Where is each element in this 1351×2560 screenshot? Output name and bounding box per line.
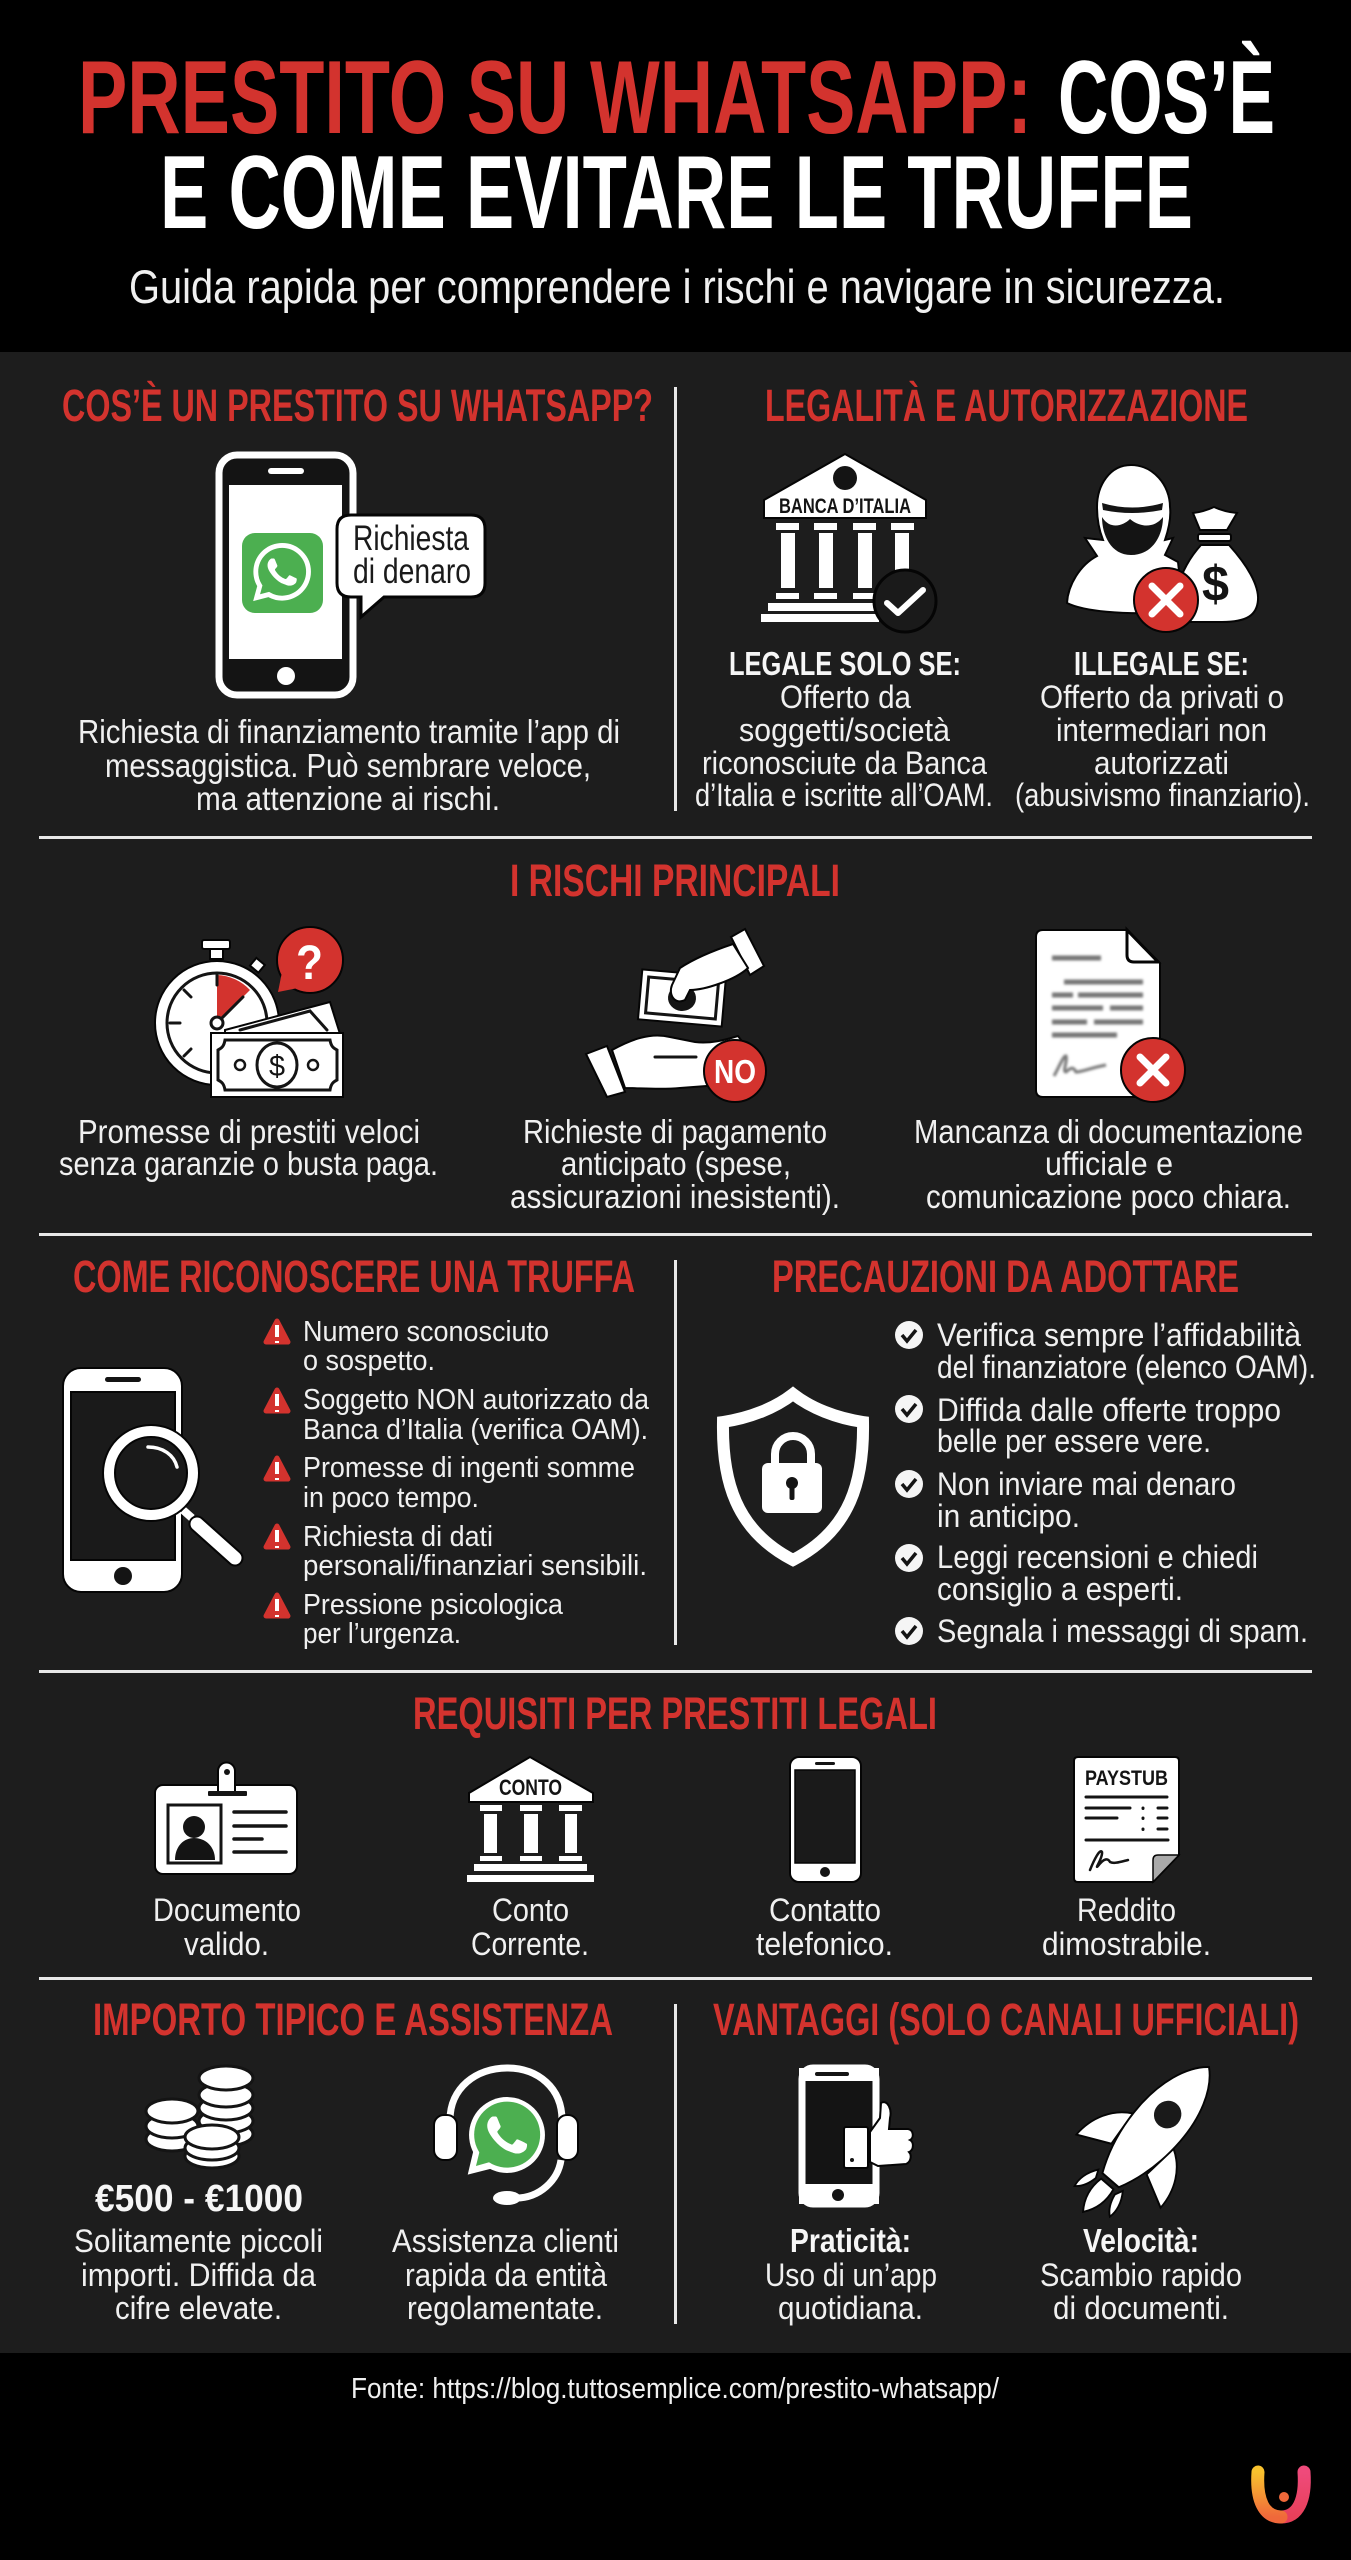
illegale se: ILLEGALE SE: [1074, 645, 1249, 682]
header [78, 40, 1275, 313]
icon: hooded thief with money bag [1067, 465, 1258, 632]
warning icon 1 [266, 1321, 288, 1343]
risk text 3: comunicazione poco chiara. [926, 1178, 1291, 1215]
assistance description: regolamentate. [407, 2290, 603, 2326]
warning item 1 [303, 1316, 549, 1377]
warning item 1: o sospetto. [303, 1345, 435, 1377]
icon: bank conto: CONTO [499, 1775, 562, 1800]
check icon 3 [895, 1470, 923, 1498]
warning icon 3 [266, 1458, 288, 1480]
check item 4: Leggi recensioni e chiedi [937, 1539, 1258, 1575]
praticità [765, 2222, 937, 2326]
panel: requisiti per prestiti legali [153, 1688, 1211, 1962]
heading: REQUISITI PER PRESTITI LEGALI [413, 1688, 937, 1739]
heading: COME RICONOSCERE UNA TRUFFA [73, 1251, 635, 1302]
heading: COS’È UN PRESTITO SU WHATSAPP? [62, 380, 653, 431]
warning item 4: Richiesta di dati [303, 1521, 493, 1553]
risk text 1: senza garanzie o busta paga. [59, 1145, 438, 1182]
amount description: importi. Diffida da [81, 2257, 316, 2293]
icon: stopwatch and money [155, 927, 343, 1097]
icon: id card [155, 1762, 297, 1874]
requisito 3 text: telefonico. [756, 1926, 893, 1962]
description: ma attenzione ai rischi. [196, 780, 500, 817]
requisito 2 text: Corrente. [471, 1926, 589, 1962]
check icon 5 [895, 1617, 923, 1645]
icon: hands exchanging money [586, 929, 766, 1102]
risk text 2 [510, 1113, 840, 1215]
icon: banca d'italia: BANCA D’ITALIA [779, 495, 911, 518]
illegale se: intermediari non [1056, 712, 1267, 748]
requisito 2 text [471, 1892, 589, 1962]
icon: phone with whatsapp [219, 455, 485, 695]
warning item 3 [303, 1452, 635, 1514]
icon: stopwatch and money: ? [296, 937, 323, 990]
requisito 1 text: Documento [153, 1892, 301, 1928]
description: Richiesta di finanziamento tramite l’app di [78, 713, 620, 750]
icon: phone with thumbs up [799, 2068, 913, 2204]
panel: vantaggi [713, 1994, 1299, 2326]
panel: precauzioni da adottare [723, 1251, 1316, 1649]
amount: €500 - €1000 [95, 2178, 303, 2220]
warning item 2: Banca d’Italia (verifica OAM). [303, 1414, 648, 1446]
assistance description: rapida da entità [405, 2257, 607, 2293]
icon: rocket [1041, 2030, 1251, 2249]
speech bubble: di denaro [353, 552, 471, 591]
illegale se: autorizzati [1094, 745, 1229, 781]
check item 2: Diffida dalle offerte troppo [937, 1392, 1281, 1428]
check item 2 [937, 1392, 1281, 1459]
legale solo se: riconosciute da Banca [702, 745, 987, 781]
check item 1 [937, 1317, 1316, 1385]
velocità: di documenti. [1053, 2290, 1229, 2326]
icon: stopwatch and money: $ [269, 1050, 285, 1083]
check icon 2 [895, 1395, 923, 1423]
warning item 3: in poco tempo. [303, 1482, 479, 1514]
assistance description: Assistenza clienti [392, 2223, 619, 2259]
risk text 2: Richieste di pagamento [523, 1113, 827, 1150]
icon: banca d'italia [761, 454, 936, 632]
requisito 4 text [1042, 1892, 1211, 1962]
legale solo se: Offerto da [780, 679, 911, 715]
amount description [74, 2223, 323, 2326]
requisito 2 text: Conto [492, 1892, 569, 1928]
icon: paystub: PAYSTUB [1085, 1767, 1168, 1790]
content background panel [0, 352, 1351, 2353]
source footer: Fonte: https://blog.tuttosemplice.com/prestito-whatsapp/ [351, 2373, 1000, 2405]
panel: importo tipico e assistenza [74, 1994, 619, 2326]
icon: bank conto [467, 1757, 594, 1882]
speech bubble [337, 515, 485, 617]
requisito 3 text [756, 1892, 893, 1962]
icon: hooded thief with money bag: $ [1202, 556, 1229, 612]
panel: i rischi principali [59, 855, 1303, 1215]
warning item 1: Numero sconosciuto [303, 1316, 549, 1348]
warning item 3: Promesse di ingenti somme [303, 1452, 635, 1484]
velocità: Velocità: [1083, 2222, 1199, 2259]
check item 5: Segnala i messaggi di spam. [937, 1613, 1308, 1649]
panel: cos'è un prestito [62, 380, 653, 817]
warning icon 5 [266, 1595, 288, 1617]
warning item 2: Soggetto NON autorizzato da [303, 1384, 650, 1416]
warning list [266, 1316, 650, 1650]
warning item 5: Pressione psicologica [303, 1589, 564, 1621]
praticità: quotidiana. [778, 2290, 923, 2326]
check icon 4 [895, 1544, 923, 1572]
heading: IMPORTO TIPICO E ASSISTENZA [93, 1994, 613, 2045]
risk text 2: assicurazioni inesistenti). [510, 1178, 840, 1215]
title [78, 40, 1275, 251]
warning item 2 [303, 1384, 650, 1446]
assistance description [392, 2223, 619, 2326]
logo [1258, 2472, 1304, 2517]
amount description: Solitamente piccoli [74, 2223, 323, 2259]
velocità: Scambio rapido [1040, 2257, 1242, 2293]
praticità: Uso di un’app [765, 2257, 937, 2293]
description: messaggistica. Può sembrare veloce, [105, 747, 591, 784]
requisito 3 text: Contatto [769, 1892, 881, 1928]
legale solo se: soggetti/società [739, 712, 950, 748]
check item 4: consiglio a esperti. [937, 1571, 1183, 1607]
legale solo se [695, 645, 993, 813]
panel: come riconoscere una truffa [63, 1251, 650, 1650]
warning item 5 [303, 1589, 564, 1650]
risk text 3: Mancanza di documentazione [914, 1113, 1303, 1150]
risk text 2: anticipato (spese, [561, 1145, 791, 1182]
check item 4 [937, 1539, 1258, 1607]
check icon 1 [895, 1321, 923, 1349]
legale solo se: d’Italia e iscritte all’OAM. [695, 777, 993, 813]
description [78, 713, 620, 817]
check item 3: Non inviare mai denaro [937, 1466, 1236, 1502]
icon: paystub [1074, 1757, 1179, 1882]
icon: document with error [1036, 930, 1185, 1102]
amount description: cifre elevate. [115, 2290, 282, 2326]
warning icon 4 [266, 1526, 288, 1548]
check item 2: belle per essere vere. [937, 1423, 1211, 1459]
panel: legalità e autorizzazione [695, 380, 1310, 813]
warning item 5: per l’urgenza. [303, 1618, 461, 1650]
requisito 4 text: dimostrabile. [1042, 1926, 1211, 1962]
warning icon 2 [266, 1390, 288, 1412]
warning item 4: personali/finanziari sensibili. [303, 1550, 647, 1582]
illegale se [1015, 645, 1310, 813]
icon: phone with magnifier [63, 1368, 235, 1592]
legale solo se: LEGALE SOLO SE: [729, 645, 961, 682]
icon: hands exchanging money: NO [714, 1053, 756, 1090]
check item 3: in anticipo. [937, 1498, 1080, 1534]
risk text 1 [59, 1113, 438, 1182]
icon: headset with whatsapp [434, 2068, 578, 2205]
illegale se: (abusivismo finanziario). [1015, 777, 1310, 813]
requisito 1 text: valido. [184, 1926, 269, 1962]
check item 3 [937, 1466, 1236, 1534]
check item 1: Verifica sempre l’affidabilità [937, 1317, 1301, 1353]
requisito 4 text: Reddito [1077, 1892, 1176, 1928]
risk text 3: ufficiale e [1045, 1145, 1173, 1182]
icon: shield with lock [723, 1394, 863, 1560]
risk text 1: Promesse di prestiti veloci [78, 1113, 420, 1150]
risk text 3 [914, 1113, 1303, 1215]
check list [895, 1317, 1316, 1649]
heading: I RISCHI PRINCIPALI [510, 855, 840, 906]
icon: phone [790, 1757, 861, 1882]
velocità [1040, 2222, 1242, 2326]
praticità: Praticità: [790, 2222, 911, 2259]
icon: coin stacks [146, 2066, 253, 2168]
warning item 4 [303, 1521, 647, 1582]
illegale se: Offerto da privati o [1040, 679, 1284, 715]
requisito 1 text [153, 1892, 301, 1962]
speech bubble: Richiesta [353, 519, 469, 558]
